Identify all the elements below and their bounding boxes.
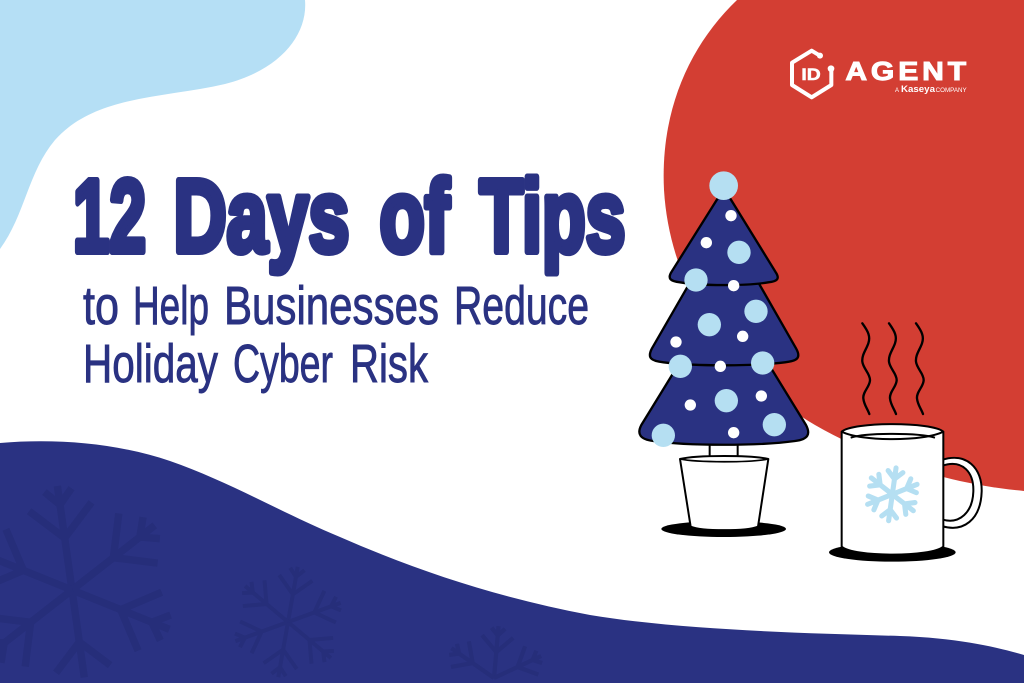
snowflake: large background [0,471,190,683]
logo tagline [895,84,967,94]
logo tagline: A [895,88,899,94]
title: Days [174,158,350,274]
subtitle: Reduce [454,276,589,336]
subtitle: Cyber [233,334,333,394]
title: of [380,158,450,274]
icon: christmas tree [639,171,808,537]
tree bottom tier [639,357,808,445]
subtitle: Holiday [83,334,218,394]
logo wordmark: AGENT [845,56,970,86]
subtitle [83,276,589,394]
subtitle: Help [133,276,209,336]
subtitle: to [83,276,119,336]
icon: mug [829,323,982,562]
title: Tips [480,158,626,274]
icon: mug snowflake [862,464,923,524]
logo tagline: COMPANY [936,88,967,94]
logo: ID Agent [792,51,970,97]
tree pot shadow [661,521,786,537]
tree ornaments: light blue [652,171,786,447]
tree ornaments: white [670,210,767,438]
mug handle [942,458,982,528]
logo icon: hexagon [792,51,834,97]
logo tagline: Kaseya [901,84,936,94]
background: light blue blob [0,0,305,249]
subtitle: Risk [350,334,429,394]
title: 12 [73,158,146,274]
mug shadow [829,543,956,562]
illustration group [639,171,982,562]
steam [862,323,924,414]
tree middle tier [650,277,798,365]
logo icon: hexagon: ID [801,65,821,84]
tree trunk [710,443,738,463]
mug body [842,424,943,555]
tree top tier [670,188,778,285]
snowflake: bottom background [440,622,551,683]
background: navy wave [0,441,1024,683]
snowflake: medium background [222,557,354,683]
tree pot [680,456,768,530]
background: red blob [664,0,1024,491]
title [73,158,626,274]
subtitle: Businesses [224,276,439,336]
